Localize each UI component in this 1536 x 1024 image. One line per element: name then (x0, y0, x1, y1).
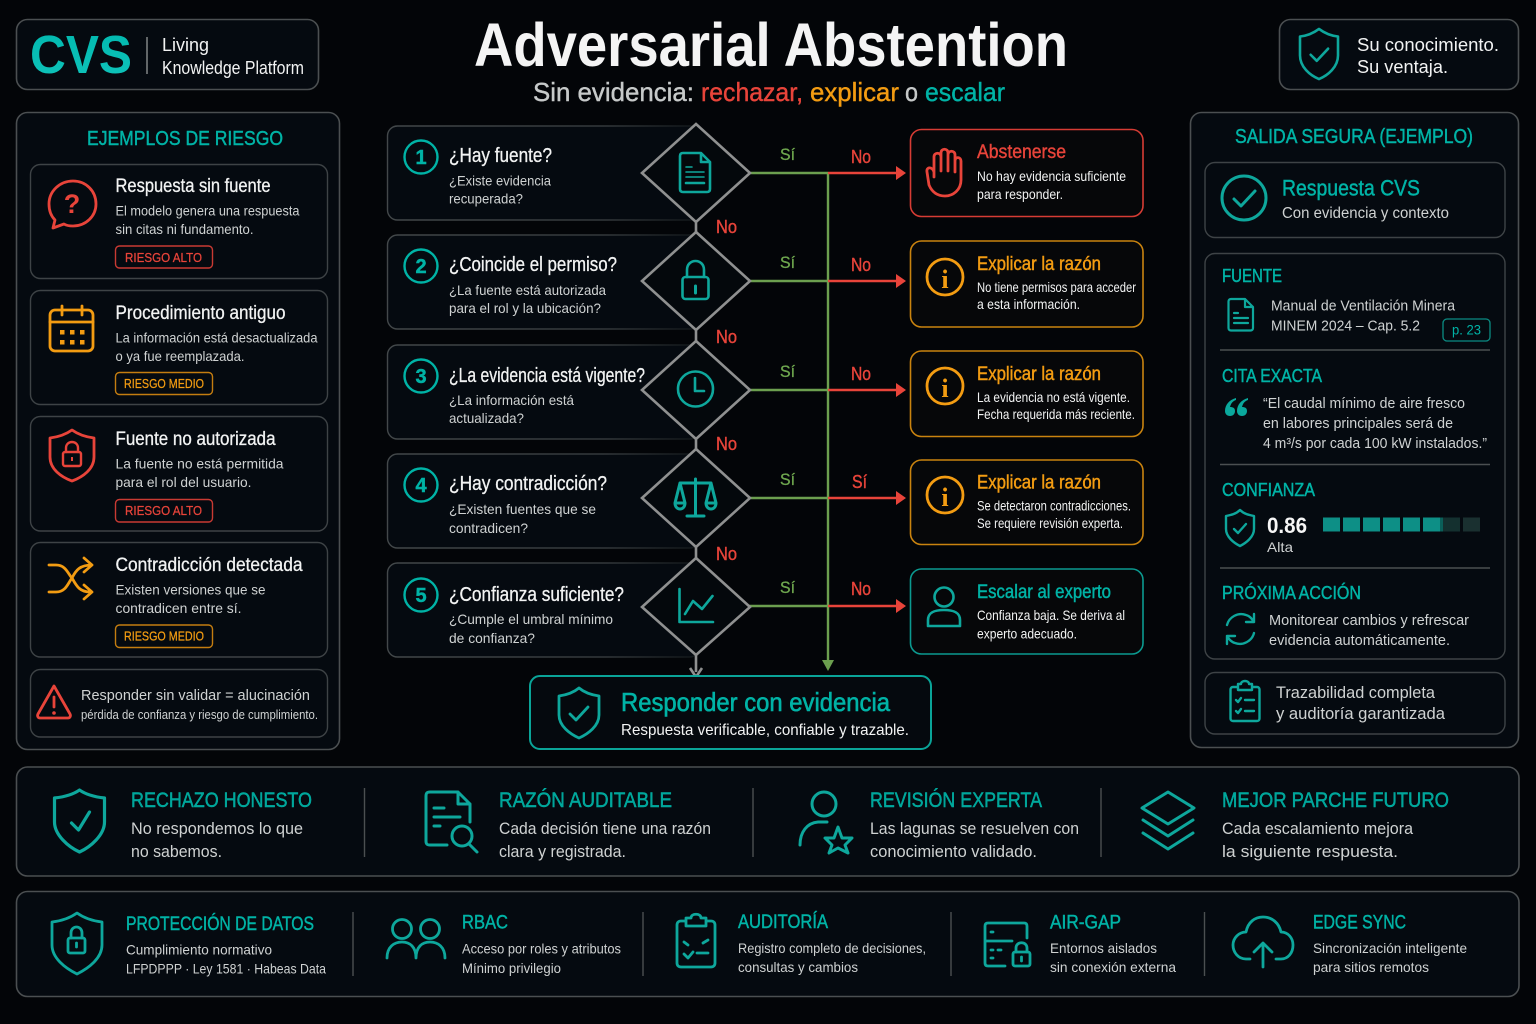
icon: quote marks (1225, 398, 1248, 416)
branch labels: Sí (852, 472, 867, 492)
benefit: mejor parche futuro: la siguiente respuesta. (1222, 842, 1398, 861)
icon: info (927, 368, 963, 404)
logo panel: Knowledge Platform (162, 58, 304, 78)
outcome: explicar permiso: a esta información. (977, 296, 1080, 312)
source block: Manual de Ventilación Minera (1271, 298, 1456, 314)
icon: person star (800, 792, 852, 853)
step 1: 1 (415, 147, 427, 169)
outcome: explicar vigencia: Explicar la razón (977, 364, 1101, 385)
step 3: 3 (415, 366, 427, 388)
decision flow (388, 124, 1143, 749)
quote block: CITA EXACTA (1222, 366, 1322, 386)
confidence block (1222, 480, 1480, 555)
item: air-gap (985, 912, 1176, 975)
risk card: respuesta sin fuente: sin citas ni fundamento. (116, 221, 254, 237)
step 4: contradicen? (449, 520, 528, 536)
icon: info: i (941, 265, 949, 294)
branch labels: No (716, 217, 737, 237)
panel: ejemplos de riesgo (16, 112, 340, 750)
badge: riesgo alto (116, 500, 212, 522)
subtitle: Sin evidencia: (533, 77, 694, 107)
item: rbac: RBAC (462, 912, 508, 934)
diamond 5: chart (642, 558, 750, 655)
badge: riesgo medio: RIESGO MEDIO (124, 628, 204, 644)
item: auditoría: consultas y cambios (738, 959, 858, 975)
step 2: para el rol y la ubicación? (449, 300, 601, 316)
confidence meter (1323, 518, 1480, 532)
badge: riesgo medio: RIESGO MEDIO (124, 376, 204, 391)
benefit: razón auditable: Cada decisión tiene una razón (499, 819, 711, 838)
item: auditoría (677, 912, 926, 975)
icon: shield lock (52, 913, 102, 974)
icon: question bubble: ? (64, 189, 80, 219)
step 2: 2 (415, 256, 427, 278)
item: edge sync: Sincronización inteligente (1313, 940, 1467, 956)
item: edge sync: para sitios remotos (1313, 959, 1429, 975)
step 3: ¿La información está (449, 392, 574, 408)
item: protección de datos: Cumplimiento normativo (126, 942, 272, 958)
item: air-gap: Entornos aislados (1050, 940, 1157, 956)
icon: info (927, 259, 963, 295)
icon: check circle (1222, 176, 1266, 220)
step 2: ¿La fuente está autorizada (449, 282, 606, 298)
icon: stop hand (927, 149, 961, 196)
warning card: pérdida de confianza y riesgo de cumplimiento. (81, 707, 318, 722)
icon: shuffle arrows (49, 558, 92, 599)
icon: refresh (1227, 614, 1254, 644)
item: rbac: Mínimo privilegio (462, 960, 561, 976)
icon: shield check (1300, 29, 1338, 79)
benefit: mejor parche futuro: MEJOR PARCHE FUTURO (1222, 789, 1449, 812)
risk card: contradicción detectada: contradicen entre sí. (116, 600, 242, 616)
diamond 4: scales (642, 449, 750, 547)
item: protección de datos: PROTECCIÓN DE DATOS (126, 913, 314, 935)
card: trazabilidad (1205, 672, 1505, 734)
next action block: PRÓXIMA ACCIÓN (1222, 582, 1361, 603)
icon: person (928, 588, 960, 626)
outcome: escalar al experto: Confianza baja. Se deriva al (977, 607, 1125, 623)
subtitle (533, 77, 1005, 107)
outcome: abstenerse (910, 130, 1143, 216)
heading: ejemplos de riesgo: EJEMPLOS DE RIESGO (87, 128, 283, 150)
risk card: respuesta sin fuente (30, 164, 328, 278)
item: auditoría: Registro completo de decisiones, (738, 940, 926, 956)
icon: users (387, 920, 445, 958)
benefit: mejor parche futuro: Cada escalamiento mejora (1222, 819, 1414, 838)
benefit: revisión experta: conocimiento validado. (870, 842, 1037, 861)
step 4: ¿Existen fuentes que se (449, 501, 596, 517)
outcome: abstenerse: No hay evidencia suficiente (977, 168, 1126, 184)
benefit: revisión experta: REVISIÓN EXPERTA (870, 789, 1042, 812)
risk card: respuesta sin fuente: Respuesta sin fuente (116, 176, 270, 197)
icon: shield check (54, 790, 104, 852)
outcome: escalar al experto (910, 569, 1143, 654)
outcome: explicar contradicción (910, 460, 1143, 544)
card: trazabilidad: y auditoría garantizada (1276, 705, 1446, 723)
benefit: razón auditable: RAZÓN AUDITABLE (499, 789, 672, 812)
step 5: ¿Confianza suficiente? (449, 584, 624, 606)
subtitle: escalar (925, 77, 1005, 107)
item: edge sync: EDGE SYNC (1313, 912, 1406, 934)
card: respuesta cvs: Respuesta CVS (1282, 176, 1420, 200)
outcome: explicar vigencia: La evidencia no está vigente. (977, 389, 1130, 405)
item: rbac (387, 912, 621, 976)
branch labels: Sí (780, 362, 795, 381)
icon: layers (1142, 792, 1194, 849)
card: trazabilidad: Trazabilidad completa (1276, 684, 1436, 702)
icon: info (927, 477, 963, 513)
icon: clipboard (1230, 681, 1260, 721)
outcome: explicar contradicción: Se requiere revisión experta. (977, 515, 1123, 531)
warning card (30, 670, 328, 737)
quote block: 4 m³/s por cada 100 kW instalados.” (1263, 436, 1487, 452)
heading: salida segura: SALIDA SEGURA (EJEMPLO) (1235, 126, 1473, 148)
step 3 (388, 345, 700, 439)
final result: responder con evidencia: Respuesta verificable, confiable y trazable. (621, 722, 909, 739)
outcome: abstenerse: para responder. (977, 186, 1063, 202)
diamond 2: lock (642, 232, 750, 330)
panel: salida segura (1190, 112, 1518, 748)
benefit: razón auditable (426, 789, 711, 861)
benefit: razón auditable: clara y registrada. (499, 842, 626, 861)
icon: shield lock (50, 430, 94, 481)
icon: document (1228, 299, 1253, 330)
step 5: 5 (415, 585, 427, 607)
logo panel: Living (162, 35, 209, 55)
benefit: rechazo honesto: RECHAZO HONESTO (131, 789, 312, 812)
step 4: ¿Hay contradicción? (449, 473, 607, 495)
subtitle: o (905, 77, 918, 107)
source block (1222, 266, 1490, 341)
step 5: de confianza? (449, 630, 535, 646)
final result: responder con evidencia: Responder con evidencia (621, 687, 890, 717)
card: respuesta cvs: Con evidencia y contexto (1282, 205, 1449, 222)
risk card: procedimiento antiguo: o ya fue reemplazada. (116, 348, 244, 364)
branch labels: Sí (780, 145, 795, 164)
benefit: rechazo honesto: no sabemos. (131, 842, 222, 861)
subtitle: rechazar, (701, 77, 803, 107)
item: protección de datos (52, 913, 326, 976)
outcome: explicar permiso: No tiene permisos para acceder (977, 279, 1136, 295)
icon: server lock (985, 923, 1030, 966)
title (474, 11, 1068, 107)
icon: question bubble (49, 181, 96, 228)
outcome: explicar contradicción: Se detectaron contradicciones. (977, 498, 1131, 514)
source block: FUENTE (1222, 266, 1282, 286)
badge: riesgo alto (116, 246, 212, 268)
step 2 (388, 235, 700, 329)
confidence block: Alta (1267, 539, 1293, 555)
benefit: revisión experta: Las lagunas se resuelven con (870, 819, 1079, 838)
risk card: fuente no autorizada: Fuente no autorizada (116, 429, 276, 450)
outcome: escalar al experto: Escalar al experto (977, 582, 1111, 603)
icon: shield check (1226, 510, 1254, 546)
branch labels (716, 145, 871, 599)
risk card: contradicción detectada: Existen versiones que se (116, 582, 266, 598)
icon: shield check (559, 688, 599, 738)
branch labels: No (851, 579, 871, 599)
subtitle: explicar (810, 77, 899, 107)
compliance strip (16, 892, 1519, 996)
diamond 3: clock (642, 341, 750, 439)
step 2: ¿Coincide el permiso? (449, 254, 617, 276)
tagline panel (1280, 20, 1518, 90)
branch labels: Sí (780, 470, 795, 489)
badge: page (1443, 319, 1490, 341)
step 5 (388, 563, 700, 657)
step 3: actualizada? (449, 410, 524, 426)
badge: riesgo medio (116, 625, 212, 648)
risk card: contradicción detectada (30, 542, 328, 657)
tagline panel: Su conocimiento. (1357, 35, 1499, 55)
branch labels: No (716, 327, 737, 347)
step 4 (388, 454, 700, 548)
quote block: en labores principales será de (1263, 416, 1453, 432)
item: air-gap: AIR-GAP (1050, 912, 1121, 934)
title: Adversarial Abstention (474, 11, 1068, 79)
final result: responder con evidencia (530, 676, 931, 749)
icon: document search (426, 792, 477, 852)
next action block: Monitorear cambios y refrescar (1269, 612, 1469, 629)
step 1: recuperada? (449, 190, 523, 206)
next action block: evidencia automáticamente. (1269, 632, 1450, 649)
outcome: explicar permiso: Explicar la razón (977, 254, 1101, 275)
item: air-gap: sin conexión externa (1050, 959, 1176, 975)
step 1: ¿Hay fuente? (449, 145, 552, 167)
diamond 1: document (642, 124, 750, 222)
risk card: fuente no autorizada: La fuente no está permitida (116, 456, 284, 472)
confidence block: 0.86 (1267, 513, 1307, 538)
risk card: respuesta sin fuente: El modelo genera una respuesta (116, 202, 300, 218)
outcome: escalar al experto: experto adecuado. (977, 626, 1077, 642)
card: respuesta cvs (1205, 162, 1505, 238)
badge: riesgo alto: RIESGO ALTO (125, 250, 202, 265)
icon: cloud upload (1233, 917, 1293, 967)
benefit: rechazo honesto: No respondemos lo que (131, 819, 303, 838)
risk card: procedimiento antiguo (30, 290, 328, 404)
branch labels: Sí (780, 578, 795, 597)
branch labels: No (851, 364, 871, 384)
benefit: rechazo honesto (54, 789, 312, 861)
connectors between diamonds (690, 221, 702, 677)
item: rbac: Acceso por roles y atributos (462, 940, 621, 956)
green and red arrows (749, 166, 906, 671)
step 1: ¿Existe evidencia (449, 172, 551, 188)
quote block (1222, 366, 1487, 452)
icon: warning triangle (38, 686, 70, 718)
branch labels: No (851, 255, 871, 275)
outcome: explicar vigencia: Fecha requerida más reciente. (977, 406, 1135, 422)
item: protección de datos: LFPDPPP · Ley 1581 · Habeas Data (126, 960, 326, 976)
step 5: ¿Cumple el umbral mínimo (449, 611, 613, 627)
step 3: ¿La evidencia está vigente? (449, 365, 645, 387)
next action block (1222, 582, 1469, 649)
outcome: explicar permiso (910, 241, 1143, 327)
badge: riesgo medio (116, 372, 212, 394)
benefit: mejor parche futuro (1142, 789, 1449, 861)
icon: info: i (941, 483, 949, 512)
outcome: abstenerse: Abstenerse (977, 142, 1066, 163)
card: evidence detail (1205, 254, 1505, 659)
badge: page: p. 23 (1452, 322, 1481, 338)
branch labels: No (716, 544, 737, 564)
icon: clipboard (677, 914, 715, 967)
warning card: Responder sin validar = alucinación (81, 687, 310, 704)
risk card: procedimiento antiguo: Procedimiento antiguo (116, 303, 286, 324)
risk card: contradicción detectada: Contradicción detectada (116, 555, 303, 576)
branch labels: No (716, 434, 737, 454)
branch labels: Sí (780, 253, 795, 272)
source block: MINEM 2024 – Cap. 5.2 (1271, 318, 1420, 334)
benefit: revisión experta (800, 789, 1079, 861)
branch labels: No (851, 147, 871, 167)
quote block: “El caudal mínimo de aire fresco (1263, 396, 1465, 412)
step 1 (388, 126, 700, 220)
risk card: fuente no autorizada (30, 416, 328, 531)
item: edge sync (1233, 912, 1467, 975)
logo panel (16, 20, 318, 90)
benefits strip (16, 767, 1519, 876)
outcome: explicar contradicción: Explicar la razón (977, 472, 1101, 494)
risk card: fuente no autorizada: para el rol del usuario. (116, 474, 252, 490)
item: auditoría: AUDITORÍA (738, 912, 828, 933)
risk card: procedimiento antiguo: La información está desactualizada (116, 330, 318, 346)
tagline panel: Su ventaja. (1357, 57, 1448, 77)
confidence block: CONFIANZA (1222, 480, 1315, 500)
step 4: 4 (415, 475, 427, 497)
logo CVS: CVS (30, 25, 132, 85)
badge: riesgo alto: RIESGO ALTO (125, 503, 202, 518)
outcome: explicar vigencia (910, 351, 1143, 436)
icon: calendar (50, 306, 93, 351)
icon: info: i (941, 374, 949, 403)
